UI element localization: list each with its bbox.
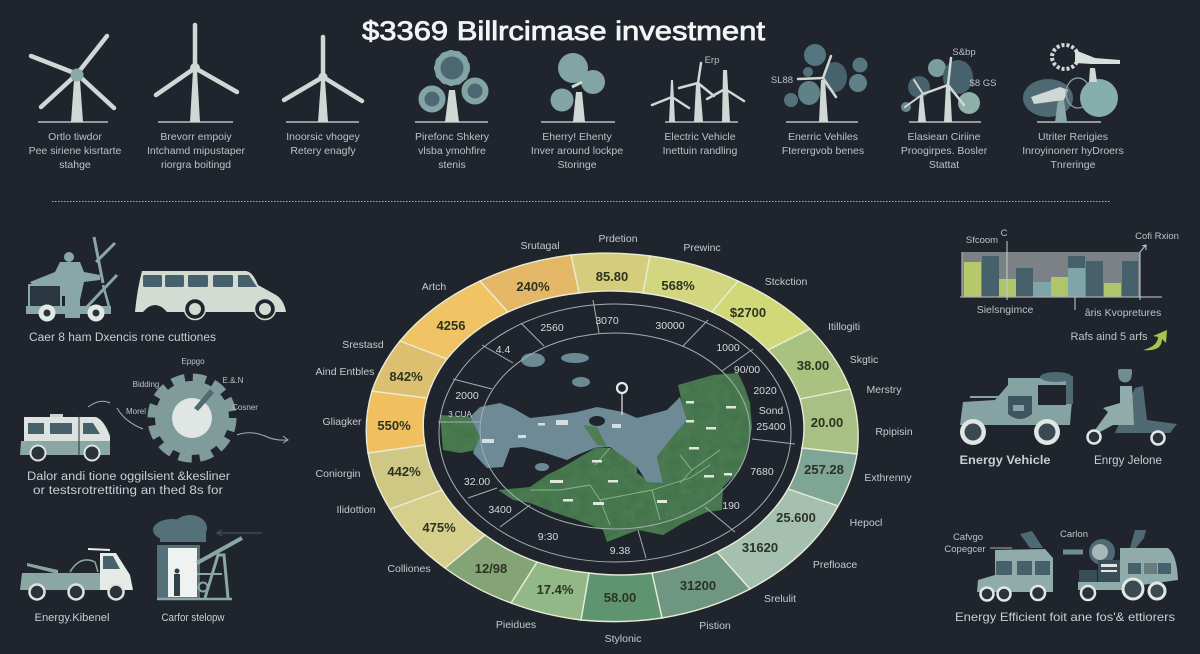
label 9: Inroyinonerr hyDroers — [1022, 145, 1124, 157]
icon: turbine 3 — [284, 37, 362, 122]
map: small lakes — [521, 353, 590, 471]
icon: white van — [135, 271, 286, 320]
inner scale values: 3070 — [595, 315, 619, 327]
label: energy jelone: Enrgy Jelone — [1094, 455, 1162, 467]
inner scale values — [448, 315, 786, 557]
ring values: 4256 — [437, 318, 465, 333]
label 9: Utriter Rerigies — [1038, 131, 1108, 143]
inner scale values: 4.4 — [496, 344, 510, 356]
callout: rising arrow — [1070, 330, 1167, 350]
icon: three turbines — [652, 55, 744, 122]
label: gear caption: Dalor andi tione oggilsient &kesliner — [27, 471, 230, 483]
label: factory: Carfor stelopw — [162, 612, 225, 624]
icon: machine truck: Carlon — [1060, 529, 1088, 540]
ring outer labels: Srestasd — [342, 339, 384, 351]
icon: tractor — [960, 372, 1073, 445]
icon: bus — [20, 414, 110, 460]
label: van caption: Caer 8 ham Dxencis rone cuttiones — [29, 332, 216, 344]
ring values: 842% — [389, 369, 423, 384]
label 6: Electric Vehicle — [664, 131, 736, 143]
map: green inlet patch — [583, 425, 607, 447]
ring outer labels: Ilidottion — [336, 504, 376, 516]
ring outer labels: Hepocl — [850, 517, 882, 529]
icon: worker with cart — [26, 237, 117, 322]
ring outer labels: Srutagal — [520, 240, 560, 252]
label 1: Pee siriene kisrtarte — [29, 145, 122, 157]
inner scale values: Sond — [759, 405, 783, 417]
ring outer labels: Prefloace — [813, 559, 857, 571]
icon: scooter rider — [1088, 369, 1177, 444]
icon: gear with pen: Bidding — [133, 380, 159, 389]
bar chart: Sfcoom — [966, 235, 998, 246]
ring segments — [366, 253, 858, 622]
ring outer labels: Colliones — [387, 563, 431, 575]
icon: three turbines: Erp — [705, 55, 719, 66]
ring chart — [316, 233, 913, 645]
ring values: 31200 — [680, 578, 716, 593]
map: pin — [617, 383, 627, 415]
inner scale values: 3400 — [488, 504, 512, 516]
inner scale values: 25400 — [756, 421, 786, 433]
ring outer labels — [316, 233, 913, 645]
ring values: 240% — [516, 279, 550, 294]
label 1: Ortlo tiwdor — [48, 131, 102, 143]
label 2: riorgra boitingd — [161, 159, 231, 171]
ring outer labels: Prewinc — [683, 242, 721, 254]
ring outer labels: Coniorgin — [316, 468, 361, 480]
ring outer labels: Stylonic — [605, 633, 641, 645]
icon: gear with pen: Cosner — [232, 403, 258, 412]
callout: rising arrow: Rafs aind 5 arfs — [1070, 331, 1148, 343]
left panel: vehicles and gear — [20, 237, 288, 624]
ring values: 20.00 — [811, 415, 843, 430]
icon: gear with pen — [126, 357, 258, 458]
label: gear caption: or testsrotrettiting an thed 8s for — [33, 485, 223, 497]
label 8: Elasiean Ciriine — [908, 131, 981, 143]
icon: machine truck — [1060, 529, 1178, 600]
ring values: 257.28 — [804, 462, 844, 477]
label: energy vehicle: Energy Vehicle — [960, 455, 1050, 467]
ring outer labels: Srelulit — [764, 593, 796, 605]
icon: pickup truck — [20, 549, 133, 600]
ring values: 58.00 — [604, 590, 636, 605]
inner scale values: 9.38 — [610, 545, 630, 557]
ring outer labels: Aind Entbles — [316, 366, 374, 378]
label 5: Eherry! Ehenty — [542, 131, 612, 143]
bar chart: âris Kvopretures — [1085, 307, 1161, 319]
icon: gear with pen: Morel — [126, 407, 146, 416]
label 3: Retery enagfy — [290, 145, 356, 157]
ring values: 38.00 — [797, 358, 829, 373]
label: bottom right caption: Energy Efficient foit ane fos'& ettiorers — [955, 610, 1175, 624]
map: land, green — [440, 373, 752, 542]
ring values: 550% — [377, 418, 411, 433]
label 4: Pirefonc Shkery — [415, 131, 490, 143]
label 3: Inoorsic vhogey — [286, 131, 361, 143]
label 7: Enerric Vehiles — [788, 131, 858, 143]
ring outer labels: Artch — [422, 281, 446, 293]
label 2: Intchamd mipustaper — [147, 145, 246, 157]
ring outer labels: Skgtic — [850, 354, 878, 366]
icon: turbine 1 — [31, 36, 114, 122]
icon: cargo van: Cafvgo — [953, 532, 983, 543]
inner scale values: 2560 — [540, 322, 564, 334]
ring values: $2700 — [730, 305, 766, 320]
label 4: stenis — [438, 159, 466, 171]
bar chart — [960, 228, 1179, 319]
map: dark bay — [589, 416, 605, 426]
label 8: Stattat — [929, 159, 959, 171]
label 5: Inver around lockpe — [531, 145, 623, 157]
icon row: turbines — [31, 25, 1120, 122]
label 6: Inettuin randling — [663, 145, 738, 157]
inner scale values: 90/00 — [734, 364, 760, 376]
ring values: 568% — [661, 278, 695, 293]
top row labels — [29, 131, 1124, 171]
icon: gear tree 2 — [541, 53, 615, 122]
icon: megaphone tower — [1023, 45, 1120, 122]
ring values: 31620 — [742, 540, 778, 555]
label 5: Storinge — [557, 159, 597, 171]
label: truck: Energy.Kibenel — [34, 612, 110, 624]
map: water region — [440, 397, 687, 483]
ring outer labels: Exthrenny — [864, 472, 912, 484]
ring outer labels: Rpipisin — [875, 426, 913, 438]
icon: turbine with bubbles — [771, 44, 868, 122]
icon: paired turbines with bubbles: $8 GS — [970, 78, 996, 89]
inner scale values: 1000 — [716, 342, 740, 354]
inner scale values: 7680 — [750, 466, 774, 478]
label 7: Fterergvob benes — [782, 145, 864, 157]
ring outer labels: Pieidues — [496, 619, 536, 631]
label 4: vlsba ymohfire — [418, 145, 486, 157]
label 8: Proogirpes. Bosler — [901, 145, 988, 157]
inner scale values: 2000 — [455, 390, 479, 402]
inner scale values: 30000 — [655, 320, 685, 332]
bar chart: Cofi Rxion — [1135, 231, 1179, 242]
label 1: stahge — [59, 159, 91, 171]
icon: cargo van: Copegcer — [944, 544, 986, 555]
ring outer labels: Gliagker — [322, 416, 362, 428]
ring outer labels: Prdetion — [598, 233, 638, 245]
ring values: 475% — [422, 520, 456, 535]
inner scale values: 3 CUA — [448, 410, 472, 419]
ring values — [377, 269, 844, 605]
arrow: to gear — [88, 401, 143, 429]
inner scale values: 9:30 — [538, 531, 558, 543]
ring outer labels: Stckction — [765, 276, 807, 288]
ring outer labels: Itillogiti — [828, 321, 860, 333]
ring outer labels: Merstry — [866, 384, 902, 396]
ring values: 85.80 — [596, 269, 628, 284]
arrow: from gear — [237, 433, 288, 443]
ring values: 12/98 — [475, 561, 507, 576]
icon: paired turbines with bubbles — [901, 47, 996, 122]
ring values: 17.4% — [537, 582, 574, 597]
ring values: 25.600 — [776, 510, 816, 525]
title: $3369 Billrcimase investment — [362, 16, 766, 46]
label: gear caption — [27, 471, 230, 497]
icon: gear with pen: E.&.N — [223, 376, 244, 385]
inner scale rings — [438, 300, 795, 562]
map — [440, 353, 752, 542]
bar chart: C — [1001, 228, 1008, 239]
icon: turbine 2 — [156, 25, 237, 122]
bar chart: Sielsngimce — [977, 304, 1033, 316]
icon: gear with pen: Eppgo — [181, 357, 205, 366]
icon: cargo van — [944, 531, 1053, 600]
right panel — [944, 228, 1179, 624]
icon: factory with crane — [153, 515, 262, 599]
inner scale values: 32.00 — [464, 476, 490, 488]
inner scale values: 190 — [722, 500, 740, 512]
label 2: Brevorr empoiy — [160, 131, 232, 143]
ring outer labels: Pistion — [699, 620, 731, 632]
map: region lines and markers — [482, 401, 736, 525]
label 9: Tnreringe — [1051, 159, 1096, 171]
icon: turbine with bubbles: SL88 — [771, 75, 793, 86]
icon: paired turbines with bubbles: S&bp — [952, 47, 976, 58]
ring values: 442% — [387, 464, 421, 479]
icon: gear tree 1 — [415, 52, 488, 122]
inner scale values: 2020 — [753, 385, 777, 397]
